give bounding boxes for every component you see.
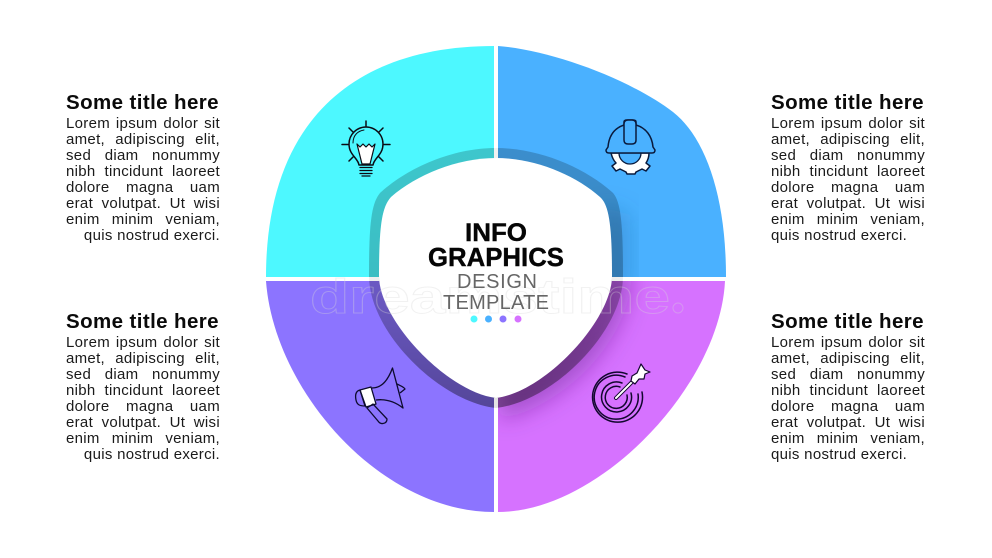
donut infographic diagram: [266, 46, 726, 512]
text block: bottom right: amet, adipiscing elit,: [771, 350, 925, 367]
icon: target with arrow: [593, 364, 650, 422]
text block: bottom right: Some title here: [771, 310, 924, 333]
gap lines: [369, 148, 623, 408]
text block: bottom left: sed diam nonummy: [66, 366, 220, 383]
segment: bottom left violet: [266, 281, 494, 512]
text block: top right: erat volutpat. Ut wisi: [771, 195, 925, 212]
text block: top right: [771, 91, 925, 244]
segment: top right blue: [498, 46, 726, 277]
text block: bottom right: [771, 310, 925, 463]
text block: top right: Some title here: [771, 91, 924, 114]
title: INFO GRAPHICS: INFO: [465, 219, 527, 247]
text block: bottom right: quis nostrud exerci.: [771, 446, 907, 463]
white shield: [379, 158, 612, 398]
text block: top left: sed diam nonummy: [66, 147, 220, 164]
text block: top left: Some title here: [66, 91, 219, 114]
subtitle: DESIGN TEMPLATE: DESIGN: [457, 271, 537, 293]
text block: top right: amet, adipiscing elit,: [771, 131, 925, 148]
text block: bottom left: quis nostrud exerci.: [84, 446, 220, 463]
text block: top right: quis nostrud exerci.: [771, 227, 907, 244]
text block: bottom left: nibh tincidunt laoreet: [66, 382, 220, 399]
text block: top right: nibh tincidunt laoreet: [771, 163, 925, 180]
text block: top left: amet, adipiscing elit,: [66, 131, 220, 148]
text block: bottom right: erat volutpat. Ut wisi: [771, 414, 925, 431]
soft drop shadow of shield: [500, 270, 632, 420]
watermark: dreamstime: [310, 271, 670, 324]
subtitle: DESIGN TEMPLATE: TEMPLATE: [443, 292, 549, 314]
text block: top left: Lorem ipsum dolor sit: [66, 115, 220, 132]
text block: bottom left: amet, adipiscing elit,: [66, 350, 220, 367]
title: INFO GRAPHICS: [428, 219, 564, 272]
text block: top left: nibh tincidunt laoreet: [66, 163, 220, 180]
text block: bottom left: enim minim veniam,: [66, 430, 220, 447]
text block: bottom right: sed diam nonummy: [771, 366, 925, 383]
text block: top right: sed diam nonummy: [771, 147, 925, 164]
text block: bottom right: enim minim veniam,: [771, 430, 925, 447]
text block: top right: Lorem ipsum dolor sit: [771, 115, 925, 132]
text block: top right: enim minim veniam,: [771, 211, 925, 228]
text block: top left: dolore magna uam: [66, 179, 220, 196]
icon: light bulb: [342, 121, 390, 176]
text block: bottom left: Lorem ipsum dolor sit: [66, 334, 220, 351]
segment: bottom right pink: [498, 281, 725, 512]
title: INFO GRAPHICS: GRAPHICS: [428, 242, 564, 272]
text block: bottom right: dolore magna uam: [771, 398, 925, 415]
legend dots: [470, 316, 522, 322]
subtitle: DESIGN TEMPLATE: [443, 271, 549, 314]
icon: helmet with gear: [606, 120, 655, 174]
text block: bottom right: Lorem ipsum dolor sit: [771, 334, 925, 351]
shield ring: [369, 148, 623, 408]
text block: bottom left: dolore magna uam: [66, 398, 220, 415]
text block: top right: dolore magna uam: [771, 179, 925, 196]
icon: megaphone: [356, 368, 405, 424]
text block: bottom left: erat volutpat. Ut wisi: [66, 414, 220, 431]
text block: top left: erat volutpat. Ut wisi: [66, 195, 220, 212]
text block: bottom left: Some title here: [66, 310, 219, 333]
text block: top left: quis nostrud exerci.: [84, 227, 220, 244]
text block: bottom left: [66, 310, 220, 463]
segment: top left cyan: [266, 46, 494, 277]
text block: top left: [66, 91, 220, 244]
text block: bottom right: nibh tincidunt laoreet: [771, 382, 925, 399]
text block: top left: enim minim veniam,: [66, 211, 220, 228]
